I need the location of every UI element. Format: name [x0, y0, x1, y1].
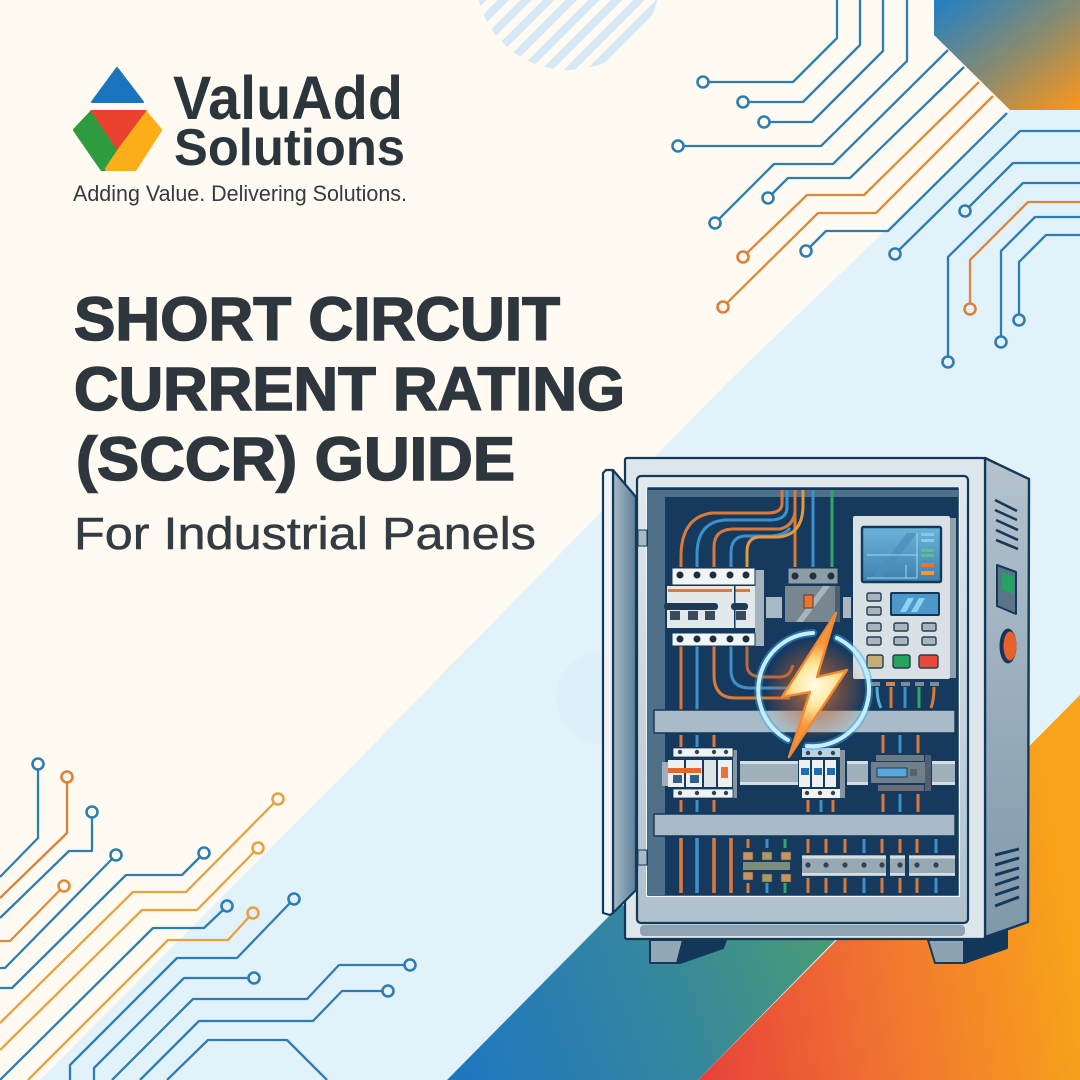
HMI screen	[862, 527, 941, 582]
cabinet side panel	[985, 458, 1029, 937]
subtitle: For Industrial Panels	[74, 508, 536, 559]
wires below breaker	[681, 646, 934, 710]
terminal caps under control unit	[871, 682, 939, 686]
open door	[603, 470, 636, 915]
status buttons	[867, 655, 938, 668]
corner shape: top right gradient	[934, 0, 1080, 110]
logo wordmark: Solutions	[174, 119, 405, 177]
logo wordmark: ValuAdd	[173, 64, 403, 132]
din rails	[740, 761, 955, 785]
upper wires	[681, 490, 832, 567]
control unit HMI	[853, 516, 956, 679]
circuit traces: bottom left	[0, 758, 416, 1080]
terminal rails	[802, 855, 955, 876]
lower wires	[681, 838, 936, 893]
side vents top	[995, 500, 1018, 549]
logo wordmark	[173, 64, 405, 177]
breaker group centre	[799, 748, 845, 798]
circuit traces: top right	[672, 0, 1080, 368]
small display	[891, 593, 939, 615]
keypad	[867, 593, 936, 645]
fuse terminal block	[743, 852, 791, 882]
main circuit breaker	[664, 568, 764, 646]
cabinet interior	[646, 487, 960, 897]
illustration: electrical panel cabinet	[603, 458, 1029, 963]
title: CURRENT RATING	[74, 355, 625, 423]
logo tagline: Adding Value. Delivering Solutions.	[73, 181, 407, 206]
door frame	[637, 476, 968, 923]
door hinges	[638, 530, 647, 865]
logo	[73, 64, 407, 206]
stop button	[1000, 628, 1016, 664]
cabinet front frame	[625, 458, 985, 939]
cabinet feet	[650, 930, 1007, 963]
title: (SCCR) GUIDE	[76, 425, 515, 493]
interior wiring	[681, 490, 936, 893]
icon: lightning fault glow	[758, 613, 869, 757]
lower rail bar	[654, 814, 955, 836]
power switch	[997, 565, 1016, 614]
band: orange diagonal	[698, 695, 1080, 1080]
title: SHORT CIRCUIT	[74, 285, 560, 353]
middle row wires	[681, 735, 918, 812]
upper rail bar	[654, 710, 955, 733]
band: blue-green diagonal	[447, 905, 850, 1080]
digital meter	[871, 755, 931, 791]
contactor	[766, 568, 851, 622]
breaker group left	[662, 748, 737, 798]
side vents bottom	[995, 849, 1019, 906]
icon: logo mark	[75, 68, 160, 169]
title	[74, 285, 625, 493]
